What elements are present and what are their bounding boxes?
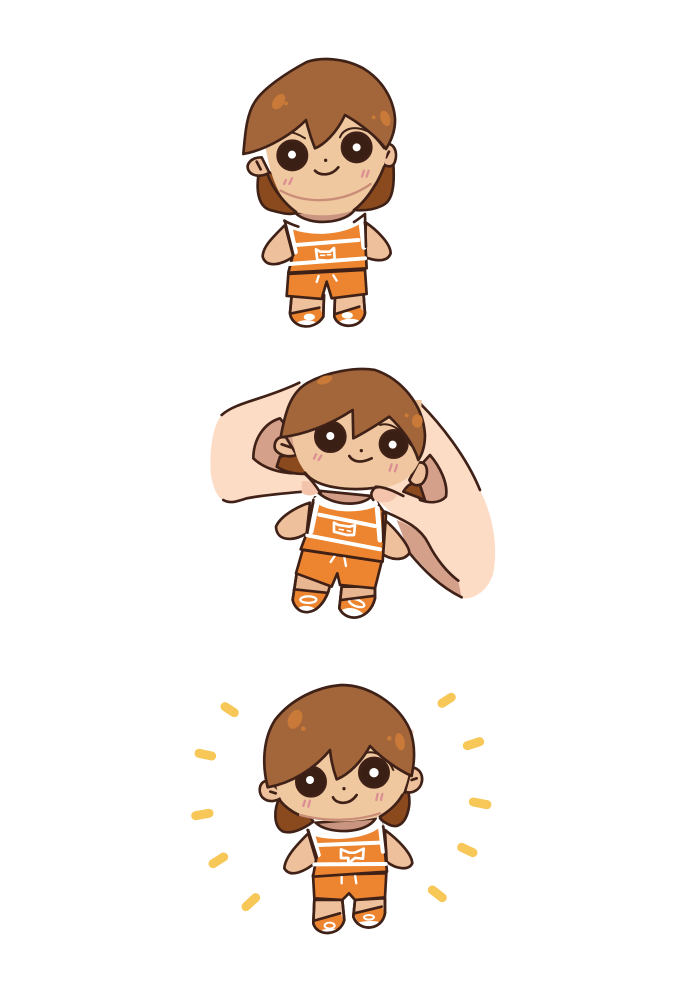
arms bbox=[263, 223, 391, 264]
back hand fill bbox=[210, 383, 495, 598]
face bbox=[290, 400, 422, 489]
neck bbox=[318, 491, 372, 504]
back hair bbox=[275, 792, 409, 832]
shorts bbox=[287, 270, 367, 299]
hand outlines bbox=[222, 383, 480, 597]
shirt bbox=[308, 822, 387, 877]
shorts bbox=[313, 873, 386, 900]
arms bbox=[284, 830, 412, 873]
legs and shoes bbox=[293, 573, 375, 618]
shorts bbox=[296, 550, 382, 588]
arms bbox=[276, 503, 409, 559]
legs and shoes bbox=[290, 292, 365, 328]
shirt bbox=[284, 214, 367, 273]
ears bbox=[260, 767, 422, 801]
yellow sparkle rays bbox=[196, 697, 487, 907]
legs and shoes bbox=[313, 898, 385, 934]
ears bbox=[248, 144, 396, 176]
doll 3: happy plush with sparkles bbox=[196, 685, 487, 934]
neck bbox=[316, 818, 376, 831]
eyes bbox=[296, 752, 393, 796]
front hair bbox=[243, 59, 395, 154]
eyes bbox=[277, 128, 384, 170]
back hair bbox=[277, 453, 425, 500]
neck bbox=[295, 209, 355, 222]
face bbox=[270, 730, 413, 822]
doll 2: doll held by hands bbox=[210, 369, 495, 618]
eyes bbox=[315, 422, 411, 458]
hands' front thumbs bbox=[302, 474, 403, 502]
ears bbox=[275, 437, 427, 485]
shirt bbox=[301, 497, 386, 562]
front hair bbox=[281, 369, 425, 460]
doll 1: standing plush bbox=[243, 59, 396, 328]
front hair bbox=[264, 685, 414, 787]
face bbox=[262, 100, 390, 215]
back hair bbox=[258, 160, 394, 214]
